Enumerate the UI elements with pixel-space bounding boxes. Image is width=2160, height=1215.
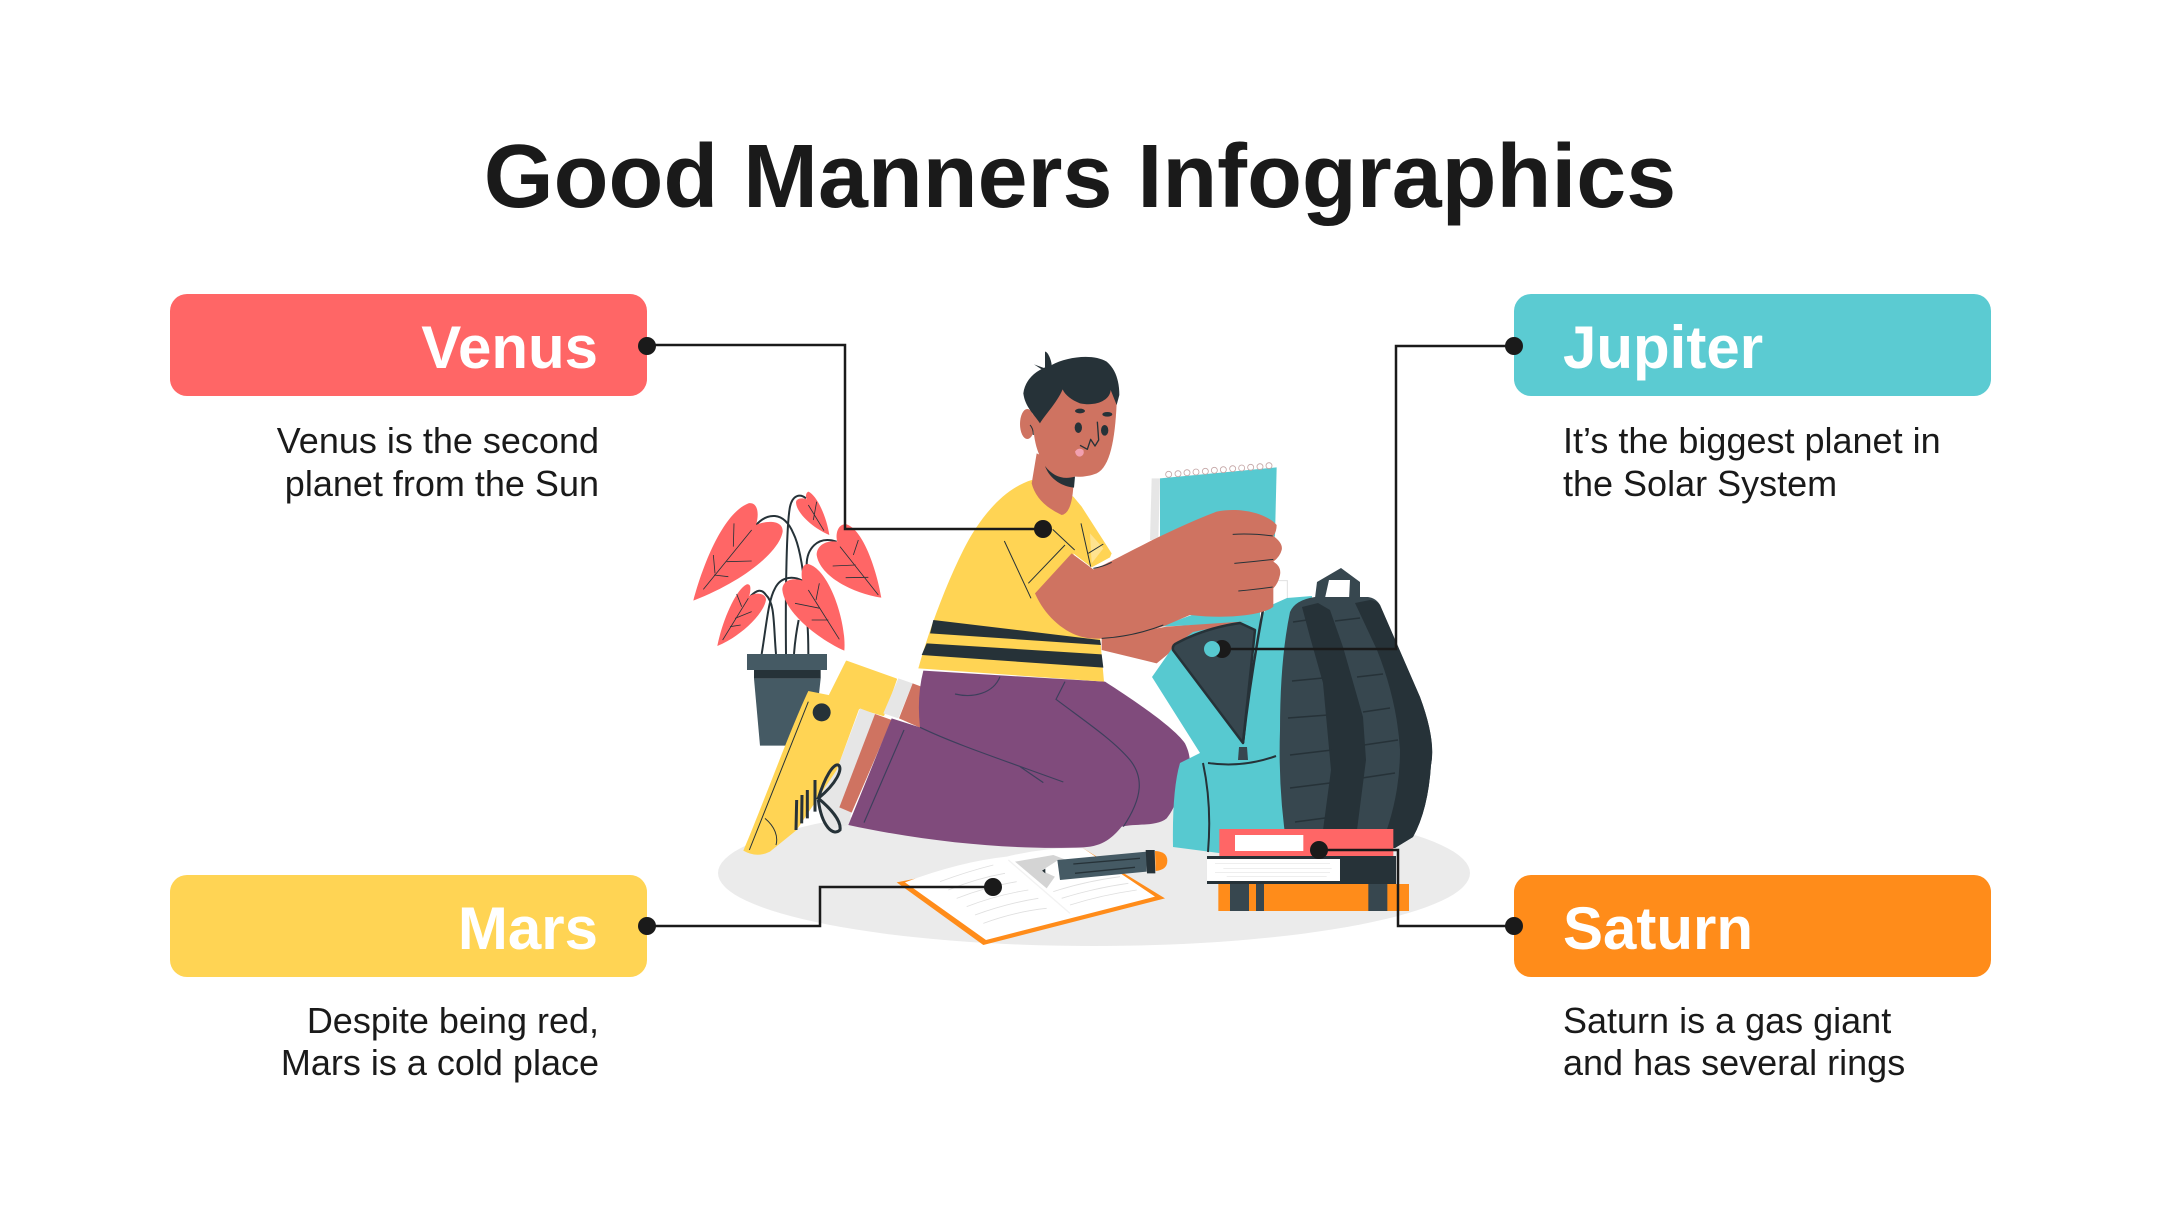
- connector: Venus: [638, 337, 1052, 538]
- Mars description: Despite being red,: [307, 1000, 599, 1041]
- Saturn description: and has several rings: [1563, 1042, 1905, 1083]
- connector: Jupiter: [1204, 337, 1523, 658]
- illustration: [693, 352, 1470, 946]
- icon: stack of books: [1207, 829, 1409, 911]
- Venus heading: Venus: [421, 314, 598, 381]
- connector: Mars: [638, 878, 1002, 935]
- back arm: [1102, 621, 1258, 663]
- trousers: [848, 671, 1190, 848]
- head: [1020, 352, 1119, 515]
- Saturn description: Saturn is a gas giant: [1563, 1000, 1891, 1041]
- Jupiter description: the Solar System: [1563, 463, 1837, 504]
- title: Good Manners Infographics: [484, 127, 1676, 227]
- Saturn heading bar: [1514, 875, 1991, 977]
- Venus description: planet from the Sun: [285, 463, 599, 504]
- Mars heading: Mars: [458, 895, 598, 962]
- panel: Jupiter: [1514, 294, 1991, 504]
- person torso and head: [918, 352, 1282, 682]
- icon: open notebook and pencil: [897, 848, 1167, 945]
- person back leg and shoes: [743, 662, 1190, 855]
- icon: spiral notepad: [1102, 463, 1287, 663]
- panel: Saturn: [1514, 875, 1991, 1083]
- Venus heading bar: [170, 294, 647, 396]
- Jupiter description: It’s the biggest planet in: [1563, 420, 1941, 461]
- Saturn heading: Saturn: [1563, 895, 1753, 962]
- icon: backpack: [1152, 568, 1432, 853]
- floor shadow: [718, 800, 1470, 946]
- Jupiter heading bar: [1514, 294, 1991, 396]
- Jupiter heading: Jupiter: [1563, 314, 1763, 381]
- panel: Venus: [170, 294, 647, 504]
- Mars description: Mars is a cold place: [281, 1042, 599, 1083]
- Mars heading bar: [170, 875, 647, 977]
- Venus description: Venus is the second: [277, 420, 599, 461]
- arm: [1035, 510, 1282, 639]
- shirt: [918, 480, 1112, 682]
- connector: Saturn: [1310, 841, 1523, 935]
- panel: Mars: [170, 875, 647, 1083]
- icon: potted plant: [693, 492, 881, 746]
